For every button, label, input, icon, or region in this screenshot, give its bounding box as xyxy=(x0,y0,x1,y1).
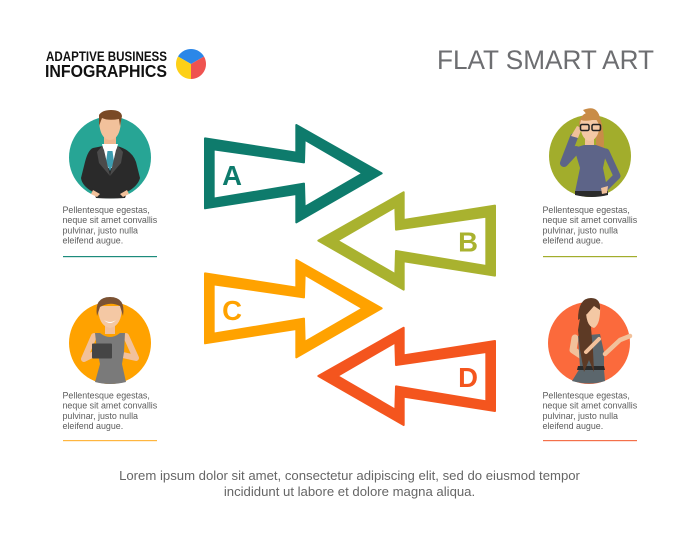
panel: woman with glasses xyxy=(542,108,638,257)
arrow diagram xyxy=(205,125,495,425)
description A: Pellentesque egestas, xyxy=(62,205,150,215)
arrow B xyxy=(318,192,495,290)
logo text xyxy=(45,49,167,81)
arrow D: D xyxy=(458,362,478,393)
description C: pulvinar, justo nulla xyxy=(62,411,138,421)
logo xyxy=(45,49,206,81)
panel: woman pointing xyxy=(542,298,638,441)
orange circle with woman xyxy=(69,297,151,384)
arrow C: C xyxy=(222,295,242,326)
footer text: incididunt ut labore et dolore magna aliqua. xyxy=(224,484,475,499)
description D: pulvinar, justo nulla xyxy=(542,411,618,421)
description B: eleifend augue. xyxy=(542,236,603,246)
description C: neque sit amet convallis xyxy=(62,401,158,411)
olive circle with woman xyxy=(549,108,631,197)
description A: pulvinar, justo nulla xyxy=(62,225,138,235)
arrow D xyxy=(318,328,495,425)
arrow A: A xyxy=(222,160,242,191)
description A: neque sit amet convallis xyxy=(62,215,158,225)
footer text: Lorem ipsum dolor sit amet, consectetur adipiscing elit, sed do eiusmod tempor xyxy=(119,468,581,483)
description B: pulvinar, justo nulla xyxy=(542,225,618,235)
description C: Pellentesque egestas, xyxy=(62,390,150,400)
description D: eleifend augue. xyxy=(542,421,603,431)
logo pie icon xyxy=(176,49,206,79)
arrow C xyxy=(205,260,382,357)
title: FLAT SMART ART xyxy=(437,44,654,75)
panel: woman with tablet xyxy=(62,297,158,441)
description C: eleifend augue. xyxy=(62,421,123,431)
red circle with woman xyxy=(548,298,630,384)
logo text: ADAPTIVE BUSINESS xyxy=(46,49,167,64)
description B: neque sit amet convallis xyxy=(542,215,638,225)
logo text: INFOGRAPHICS xyxy=(45,61,167,81)
description A: eleifend augue. xyxy=(62,236,123,246)
arrow B: B xyxy=(458,226,478,258)
teal circle with man xyxy=(69,110,151,198)
arrow A xyxy=(205,125,382,222)
panel: businessman xyxy=(62,110,158,257)
description D: Pellentesque egestas, xyxy=(542,390,630,400)
description D: neque sit amet convallis xyxy=(542,401,638,411)
description B: Pellentesque egestas, xyxy=(542,205,630,215)
